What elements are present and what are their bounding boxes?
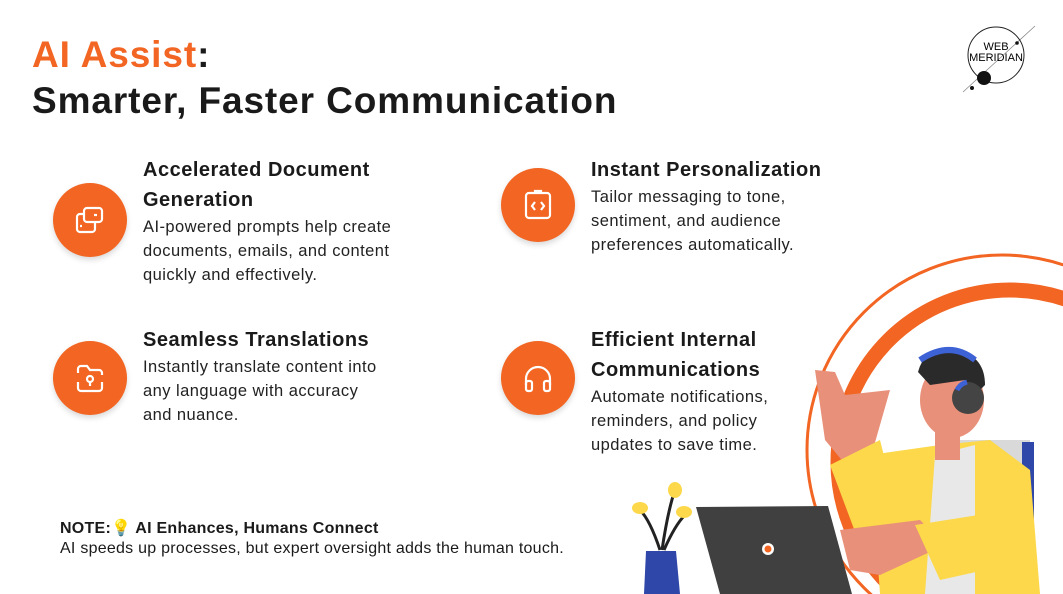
- panel: seamless translations: [51, 329, 377, 424]
- panel: instant personalization: Instant Personalization: [591, 159, 821, 181]
- panel: seamless translations: Instantly translate content into: [143, 358, 377, 376]
- panel: instant personalization: [499, 159, 821, 254]
- panel: efficient internal communications: Automate notifications,: [591, 388, 768, 406]
- icon: documents: [53, 183, 127, 257]
- panel: accelerated document generation: quickly and effectively.: [143, 266, 317, 284]
- panel: accelerated document generation: AI-powered prompts help create: [143, 218, 391, 236]
- panel: seamless translations: Seamless Translations: [143, 329, 369, 351]
- panel: efficient internal communications: reminders, and policy: [591, 412, 757, 430]
- panel: instant personalization: Tailor messaging to tone,: [591, 188, 786, 206]
- icon: code clipboard: [501, 168, 575, 242]
- panel: efficient internal communications: Communications: [591, 359, 760, 381]
- title: [32, 34, 617, 121]
- note: [60, 518, 564, 557]
- note: AI speeds up processes, but expert oversight adds the human touch.: [60, 540, 564, 557]
- panel: accelerated document generation: Accelerated Document: [143, 159, 370, 181]
- icon: folder: [53, 341, 127, 415]
- panel: accelerated document generation: Generation: [143, 189, 254, 211]
- panel: instant personalization: preferences automatically.: [591, 236, 794, 254]
- note: NOTE:💡 AI Enhances, Humans Connect: [60, 520, 379, 537]
- panel: efficient internal communications: [499, 329, 768, 454]
- panel: accelerated document generation: documents, emails, and content: [143, 242, 389, 260]
- icon: headphones: [501, 341, 575, 415]
- logo: [962, 26, 1036, 92]
- title: AI Assist:: [32, 34, 210, 75]
- logo: WEB: [983, 41, 1009, 53]
- logo: MERIDIAN: [969, 52, 1023, 64]
- panel: instant personalization: sentiment, and audience: [591, 212, 781, 230]
- title: Smarter, Faster Communication: [32, 80, 617, 121]
- panel: accelerated document generation: [51, 159, 391, 284]
- panel: efficient internal communications: Efficient Internal: [591, 329, 757, 351]
- panel: efficient internal communications: updates to save time.: [591, 436, 757, 454]
- panel: seamless translations: and nuance.: [143, 406, 239, 424]
- illustration: person at laptop: [632, 254, 1063, 594]
- panel: seamless translations: any language with accuracy: [143, 382, 358, 400]
